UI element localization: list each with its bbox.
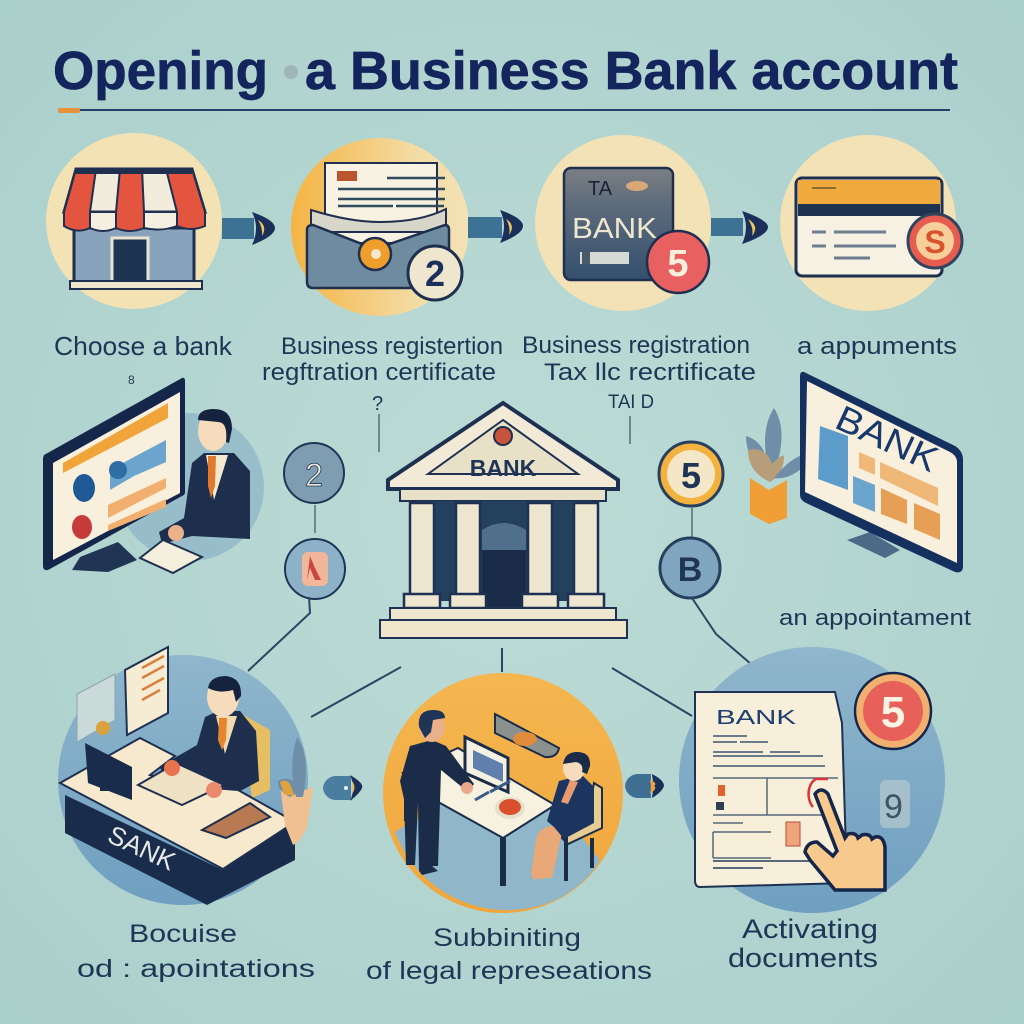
panel: business registration: [291, 138, 469, 316]
step label: activating documents: documents: [728, 943, 878, 973]
panel: choose a bank: [46, 133, 222, 309]
step label: business registration: Business registertion: [281, 333, 503, 360]
icon: potted plant: [278, 737, 313, 845]
icon: bank tablet: [564, 168, 673, 280]
step label: activating documents: Activating: [742, 914, 878, 944]
small marks: 8: [128, 373, 135, 387]
badge: B right: [660, 538, 720, 598]
badge: document left: [285, 539, 345, 599]
badge 2: [408, 246, 462, 300]
icon: desk with monitor: [403, 714, 559, 886]
connectors: [248, 597, 751, 717]
icon: small lock: [880, 780, 910, 828]
panel: activating account document: [679, 647, 945, 913]
icon: bank tablet: TA: [588, 178, 613, 200]
badge: 2 left: 2: [305, 457, 323, 493]
icon: form card: [796, 178, 942, 276]
step label: business appointments: Bocuise: [129, 920, 237, 948]
icon: businessman: [140, 409, 250, 573]
arrow 2: [468, 210, 523, 243]
badge s: [908, 214, 962, 268]
icon: seated person: [531, 752, 602, 881]
step label: choose a bank: Choose a bank: [54, 331, 233, 361]
badge 2: 2: [425, 253, 445, 294]
badge 5: 5: [881, 688, 905, 737]
title: Opening: [53, 41, 268, 101]
icon: document: BANK: [716, 707, 797, 729]
panel: tax bank card: [535, 135, 711, 311]
icon: desk: [60, 738, 295, 905]
icon: envelope with document: [307, 163, 449, 288]
arrow 1: [222, 212, 275, 245]
icon: central bank building: BANK: [470, 455, 537, 481]
panel: application form: [780, 135, 962, 311]
step label: activating documents: [728, 914, 878, 973]
step label: business appointments: [77, 920, 315, 983]
small marks: [128, 373, 692, 538]
panel: document submission: [383, 673, 623, 913]
text: an appointment: an appointament: [779, 605, 971, 630]
icon: bank tablet: BANK: [572, 213, 658, 245]
icon: monitor: [43, 378, 185, 572]
panel: right monitor: [746, 372, 963, 572]
icon: monitor with bank: BANK: [830, 397, 945, 480]
panel: online computer: [43, 378, 264, 573]
icon: desk: SANK: [103, 819, 181, 877]
step label: appointments: a appuments: [797, 333, 957, 360]
icon: banker at desk: [159, 676, 270, 798]
badge s: S: [924, 224, 946, 260]
step label: tax certificate: TAI D: [608, 392, 654, 413]
step label: submitting: Subbiniting: [433, 924, 581, 952]
icon: document: [695, 692, 847, 887]
step label: business appointments: od : apointations: [77, 955, 315, 983]
step label: submitting: of legal represeations: [366, 957, 652, 985]
step label: business registration: regftration certificate: [262, 359, 496, 386]
badge: 5 right: 5: [681, 455, 701, 496]
title: [53, 41, 958, 113]
panel: bank desk meeting: [58, 647, 313, 905]
title: a Business Bank account: [305, 41, 958, 101]
icon: monitor with bank: [800, 372, 963, 572]
badge 5: [855, 673, 931, 749]
step label: tax certificate: Tax llc recrtificate: [544, 359, 756, 386]
icon: pointing hand: [805, 790, 885, 890]
badge: B right: B: [678, 551, 702, 589]
badge: 2 left: [284, 443, 344, 503]
badge 5: [647, 231, 709, 293]
arrow 5: [625, 774, 664, 798]
icon: standing person: [400, 710, 474, 875]
icon: wall charts: [77, 647, 168, 742]
arrow 4: [323, 775, 362, 801]
icon: plant: [746, 408, 807, 524]
step label: tax certificate: [522, 332, 756, 413]
arrow 3: [711, 211, 768, 244]
small marks: ?: [372, 393, 383, 415]
badge: 5 right: [659, 442, 723, 506]
icon: bank shop: [64, 169, 205, 289]
icon: small lock: 9: [884, 788, 903, 826]
step label: submitting: [366, 924, 652, 985]
step label: tax certificate: Business registration: [522, 332, 750, 359]
icon: central bank building: [380, 403, 627, 638]
badge 5: 5: [667, 243, 689, 285]
floor: [395, 804, 600, 910]
step label: business registration: [262, 333, 503, 386]
